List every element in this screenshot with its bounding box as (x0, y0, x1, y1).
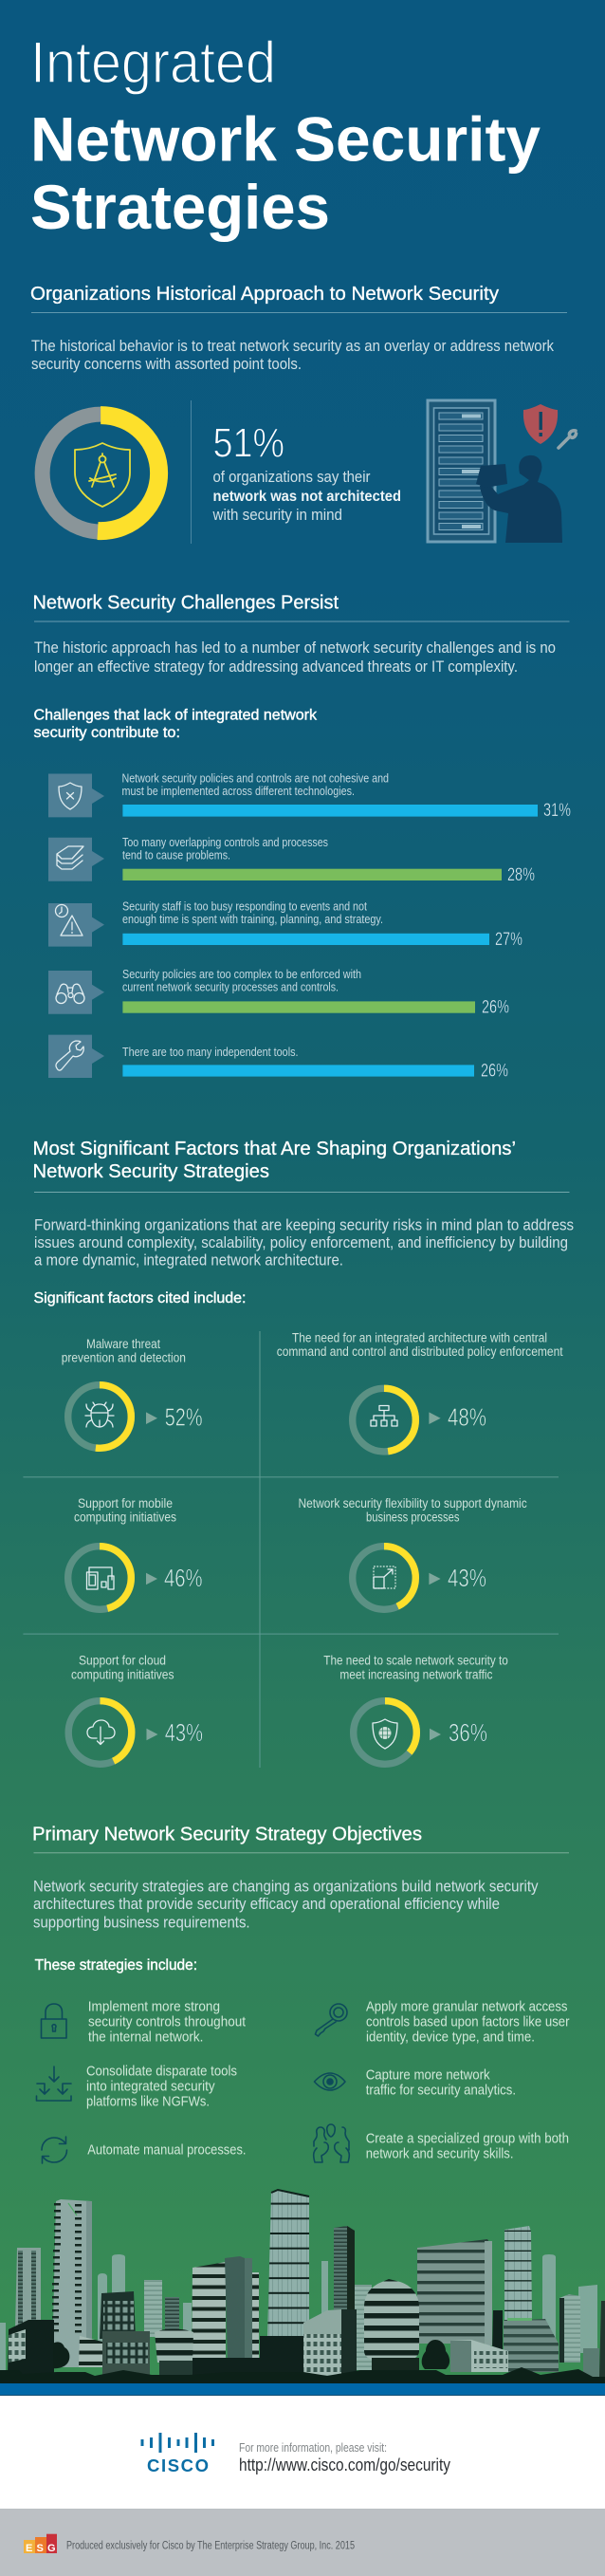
factor: flexibility 43 percent: 43% (448, 1566, 486, 1592)
round building (155, 2329, 193, 2363)
icon: stacked layers (57, 846, 83, 869)
objective: consolidate tools: platforms like NGFWs. (86, 2093, 210, 2109)
icon: mobile devices (87, 1567, 114, 1589)
logo: cisco (140, 2433, 214, 2475)
objective: consolidate tools: into integrated security (86, 2078, 215, 2094)
subheading: challenges list: Challenges that lack of integrated network (34, 707, 318, 723)
bar row: 26 percent, complex policies: Security policies are too complex to be enforced with (122, 967, 361, 981)
objective: automate: Automate manual processes. (87, 2142, 247, 2159)
logo: ESG (24, 2534, 57, 2554)
icon: shield with x (59, 783, 82, 809)
factor: malware 52 percent (62, 1337, 203, 1448)
factor: mobile 46 percent: 46% (164, 1566, 203, 1592)
icon: hierarchy (371, 1406, 397, 1426)
objective: capture traffic: Capture more network (366, 2067, 490, 2084)
statistic: 51 percent: of organizations say their (212, 469, 371, 486)
factor: scale 36 percent: meet increasing network traffic (339, 1667, 493, 1681)
objective: capture traffic: traffic for security analytics. (366, 2083, 516, 2099)
logo: ESG: S (36, 2543, 44, 2554)
subheading: challenges list: security contribute to: (34, 725, 180, 741)
paragraph: challenges: longer an effective strategy for addressing advanced threats or IT complexity. (34, 658, 518, 676)
icon: red warning shield (523, 404, 558, 444)
statistic: 51 percent: network was not architected (212, 489, 401, 505)
bar row: 27 percent (48, 899, 522, 950)
title: Network Security (30, 104, 541, 175)
objective: automate (42, 2137, 247, 2163)
icon: clock and warning triangle (55, 905, 82, 936)
factor: mobile 46 percent (68, 1496, 203, 1609)
heading: challenges: Network Security Challenges Persist (32, 592, 339, 613)
heading: objectives: Primary Network Security Strategy Objectives (32, 1824, 422, 1844)
objective: stronger controls: the internal network. (88, 2029, 203, 2045)
footer: white cisco panel (0, 2396, 605, 2509)
factor: scale 36 percent: The need to scale network security to (323, 1653, 508, 1668)
icon: cloud download (87, 1720, 115, 1744)
objective: specialized group: Create a specialized group with both (366, 2130, 569, 2146)
title: Integrated (30, 30, 276, 96)
objective: stronger controls: security controls throughout (88, 2013, 247, 2029)
bar row: 26 percent, independent tools: 26% (481, 1062, 508, 1082)
factor: malware 52 percent: prevention and detection (62, 1351, 186, 1365)
bar row: 28 percent: 28% (507, 865, 535, 885)
icon: padlock (42, 2004, 66, 2038)
icon: shield with compass (75, 443, 130, 507)
building: low white block (303, 2309, 341, 2377)
ground silhouette (0, 2367, 605, 2383)
tower: tall glass (52, 2199, 92, 2367)
subheading: factors list: Significant factors cited include: (34, 1290, 247, 1307)
factor: flexibility 43 percent (298, 1496, 527, 1609)
objective: capture traffic (315, 2067, 516, 2099)
bar row: 27 percent: enough time is spent with training, planning, and strategy. (122, 912, 383, 926)
trees (53, 2340, 449, 2369)
logo: ESG: E (26, 2543, 32, 2554)
donut chart: 51 percent (43, 415, 160, 532)
icon: wrench (56, 1041, 83, 1070)
dome building (364, 2279, 419, 2363)
bar row: 31 percent (48, 771, 571, 821)
icon: people group (314, 2124, 349, 2162)
heading: factors: Network Security Strategies (32, 1161, 269, 1182)
paragraph: factors: a more dynamic, integrated network architecture. (34, 1251, 343, 1269)
footer: grey credit bar (0, 2509, 605, 2576)
icon: technician silhouette (476, 455, 562, 543)
footer link text (239, 2441, 450, 2474)
bar row: 26 percent, complex policies (48, 967, 509, 1018)
factor: integrated architecture 48 percent: The need for an integrated architecture with central (292, 1330, 547, 1344)
bar row: 26 percent, complex policies: 26% (482, 998, 509, 1018)
logo: cisco: CISCO (147, 2456, 209, 2475)
building: mid low (102, 2331, 150, 2379)
bar row: 27 percent: Security staff is too busy responding to events and not (122, 899, 367, 914)
objective: granular access: controls based upon factors like user (366, 2013, 569, 2029)
bar row: 28 percent (48, 835, 535, 885)
factor: integrated architecture 48 percent: command and control and distributed policy enforcement (277, 1344, 563, 1359)
icon: eye (315, 2073, 345, 2090)
illustration: server rack with technician (428, 400, 577, 543)
factor: cloud 43 percent (68, 1653, 203, 1764)
objective: granular access: Apply more granular network access (366, 1998, 567, 2014)
factor: flexibility 43 percent: Network security flexibility to support dynamic (298, 1496, 527, 1510)
panel: strategy objectives (32, 1824, 569, 2163)
bar row: 27 percent: 27% (495, 930, 522, 950)
factor: cloud 43 percent: 43% (165, 1720, 203, 1747)
blue footer band (0, 2383, 605, 2396)
credit line: Produced exclusively for Cisco by The Enterprise Strategy Group, Inc. 2015 (66, 2541, 355, 2552)
paragraph: objectives: supporting business requirements. (33, 1914, 250, 1932)
objective: consolidate tools: Consolidate disparate tools (86, 2063, 237, 2079)
bar row: 26 percent, independent tools: There are too many independent tools. (122, 1045, 298, 1059)
objective: stronger controls: Implement more strong (88, 1998, 220, 2014)
factor: cloud 43 percent: computing initiatives (71, 1667, 174, 1681)
objective: granular access: identity, device type, and time. (366, 2029, 535, 2045)
illustration: city skyline (0, 2190, 605, 2383)
bar row: 31 percent: Network security policies and controls are not cohesive and (121, 771, 389, 786)
panel: historical approach (30, 284, 577, 544)
bar row: 31 percent: must be implemented across different technologies. (121, 784, 355, 798)
logo: ESG: G (47, 2543, 56, 2554)
objective: specialized group (314, 2124, 569, 2162)
building: tall tower (267, 2190, 309, 2339)
bar row: 28 percent: Too many overlapping controls and processes (122, 835, 328, 849)
paragraph: objectives: Network security strategies are changing as organizations build network security (33, 1877, 539, 1895)
heading: factors (32, 1139, 516, 1182)
footer link text: For more information, please visit: (239, 2441, 387, 2455)
tower: narrow glass (504, 2226, 532, 2321)
building: grey offices (417, 2239, 491, 2344)
building: small windows (79, 2336, 102, 2367)
subheading: strategies: These strategies include: (35, 1957, 197, 1974)
bar row: 26 percent, complex policies: current network security processes and controls. (122, 979, 339, 993)
icon: shield with globe (373, 1719, 397, 1749)
factor: malware 52 percent: Malware threat (86, 1337, 160, 1351)
objective: granular access (315, 1998, 569, 2045)
building: far right edge (599, 2301, 605, 2377)
tower left (15, 2248, 41, 2329)
statistic: 51 percent: 51% (212, 419, 284, 466)
icon: consolidate arrows (36, 2066, 71, 2101)
title: Strategies (30, 172, 330, 242)
footer link text: http://www.cisco.com/go/security (239, 2456, 450, 2474)
bar row: 28 percent: tend to cause problems. (122, 847, 230, 862)
paragraph: objectives: architectures that provide security efficacy and operational efficiency while (33, 1895, 500, 1913)
building: dark stripe tower (334, 2226, 355, 2353)
title (30, 30, 541, 242)
factor: cloud 43 percent: Support for cloud (79, 1653, 166, 1668)
factor: mobile 46 percent: Support for mobile (78, 1496, 173, 1510)
icon: key (315, 2004, 347, 2036)
heading: historical approach: Organizations Historical Approach to Network Security (30, 284, 499, 305)
objective: specialized group: network and security skills. (366, 2145, 514, 2161)
factor: scale 36 percent: 36% (449, 1720, 487, 1747)
icon: scale up arrow (374, 1566, 395, 1588)
factor: flexibility 43 percent: business processes (366, 1510, 460, 1525)
statistic: 51 percent (212, 419, 401, 524)
building: striped offices (192, 2262, 226, 2361)
bar row: 26 percent, independent tools (48, 1035, 508, 1082)
paragraph: factors (34, 1215, 574, 1269)
icon: refresh arrows (42, 2137, 66, 2163)
paragraph: challenges (34, 639, 556, 676)
factor: integrated architecture 48 percent: 48% (448, 1404, 486, 1431)
panel: challenges persist (32, 592, 571, 1082)
icon: bug (85, 1402, 114, 1427)
heading: factors: Most Significant Factors that Are Shaping Organizations’ (32, 1139, 516, 1159)
objective: consolidate tools (36, 2063, 237, 2109)
building: dark grid (100, 2291, 136, 2339)
subheading: challenges list (34, 707, 318, 741)
factor: malware 52 percent: 52% (165, 1404, 203, 1431)
icon: wrench (559, 431, 577, 448)
building: dark block left (8, 2320, 54, 2377)
panel: significant factors (23, 1139, 574, 1768)
pale background towers (0, 2254, 597, 2370)
building: right low grey (492, 2310, 503, 2353)
intro paragraph: security concerns with assorted point tools. (31, 355, 302, 373)
objective: stronger controls (42, 1998, 247, 2045)
factor: mobile 46 percent: computing initiatives (74, 1510, 176, 1525)
dark plinth (192, 2358, 265, 2383)
factor: scale 36 percent (323, 1653, 508, 1764)
icon: binoculars (56, 984, 84, 1004)
building: far right striped (559, 2294, 580, 2363)
intro paragraph (31, 337, 554, 373)
factor: integrated architecture 48 percent (277, 1330, 563, 1452)
paragraph: objectives (33, 1877, 539, 1932)
building: low white wing (450, 2340, 508, 2372)
bar row: 31 percent: 31% (543, 801, 571, 821)
statistic: 51 percent: with security in mind (212, 507, 342, 524)
